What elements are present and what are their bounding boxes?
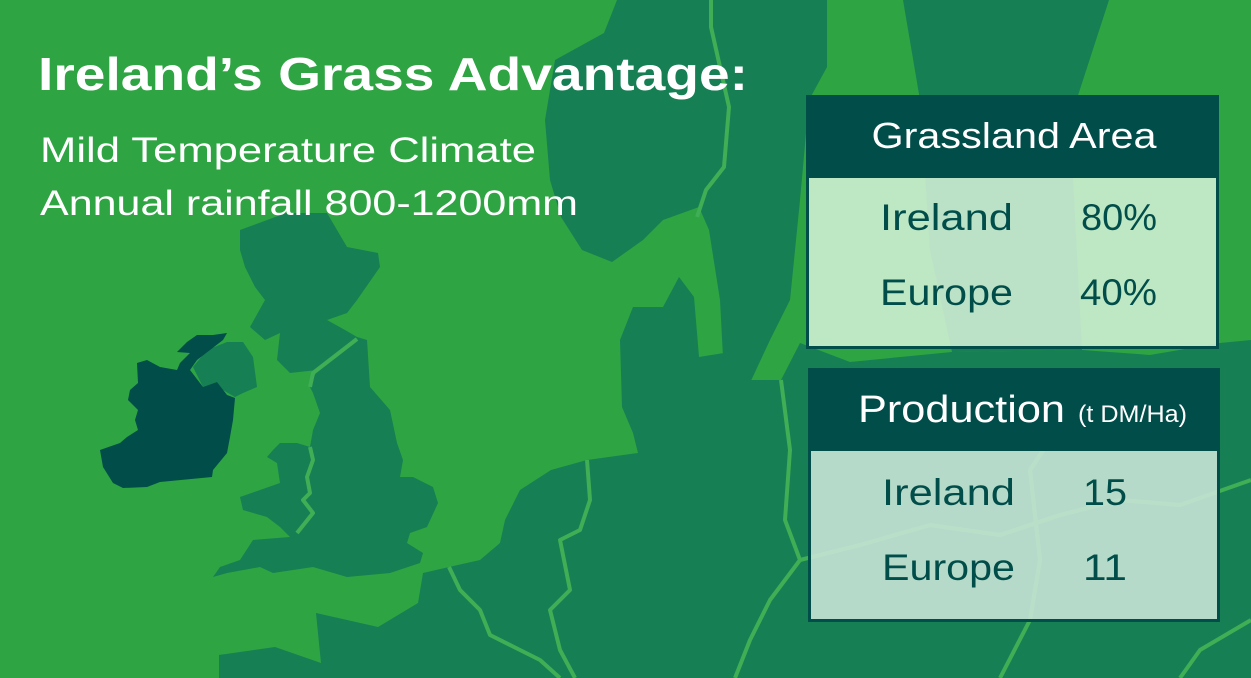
subtitle text block: Annual rainfall 800-1200mm <box>40 184 578 223</box>
rows: grassland values <box>880 197 1157 313</box>
rows: production values: Europe <box>882 547 1015 588</box>
rows: production values: Ireland <box>882 472 1015 513</box>
map: border lines <box>297 0 1251 678</box>
rows: grassland values: Europe <box>880 272 1013 313</box>
subtitle text block <box>40 131 578 223</box>
map: Ireland highlighted <box>100 333 235 488</box>
panel header: grassland area <box>806 95 1219 178</box>
title: Ireland’s Grass Advantage: <box>38 48 748 100</box>
panel: production: Production <box>858 389 1065 431</box>
rows: production values: 15 <box>1083 472 1127 513</box>
land: Finland strip <box>903 0 1109 352</box>
land: Great Britain <box>213 213 438 577</box>
subtitle text block: Mild Temperature Climate <box>40 131 536 170</box>
panel header: production <box>808 368 1220 451</box>
panel: grassland area: Grassland Area <box>872 115 1158 156</box>
land: Northern Ireland <box>193 342 257 397</box>
panel: grassland area <box>806 95 1219 348</box>
land: continent <box>219 277 1251 678</box>
rows: grassland values: 80% <box>1081 197 1157 238</box>
rows: grassland values: 40% <box>1080 272 1157 313</box>
panel: production: (t DM/Ha) <box>1078 401 1187 428</box>
panel: production <box>808 368 1220 620</box>
rows: production values <box>882 472 1127 588</box>
rows: production values: 11 <box>1083 547 1127 588</box>
land: Norway and Sweden <box>545 0 827 400</box>
rows: grassland values: Ireland <box>880 197 1013 238</box>
